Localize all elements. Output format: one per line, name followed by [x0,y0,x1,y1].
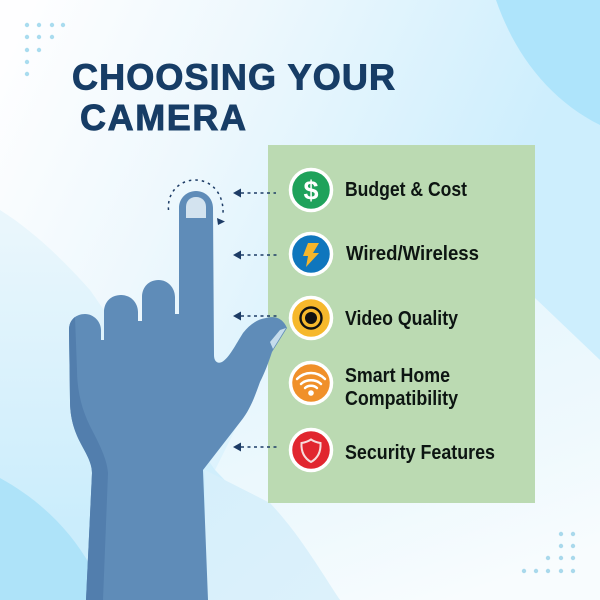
arrow: budget [233,188,276,198]
title [72,56,395,138]
hand shading [69,317,108,600]
title: CHOOSING YOUR [72,56,395,98]
arrow: wired [233,250,278,260]
label: security: Security Features [345,442,495,464]
arc arrow around fingertip [168,180,225,225]
label: budget: Budget & Cost [345,179,467,201]
fingernail [186,197,206,218]
title: CAMERA [80,97,246,138]
label: smart home [345,365,459,410]
icon: dollar [290,170,332,210]
label: smart home: Smart Home [345,365,450,387]
icon: wifi [290,362,332,404]
panel: green options background [268,145,535,503]
arrow: security [233,442,278,452]
icon: lightning [290,234,332,274]
icon: lens [290,298,332,338]
arrow: video [233,312,278,320]
icon: dollar: $ [303,176,319,206]
label: wired: Wired/Wireless [346,243,479,265]
icon: pointing hand [69,191,287,600]
icon: shield [290,430,332,470]
label: video: Video Quality [345,308,459,330]
decorative dots bottom right [522,532,575,573]
decorative dots top left [25,23,65,76]
thumbnail [270,328,286,349]
label: smart home: Compatibility [345,388,459,410]
